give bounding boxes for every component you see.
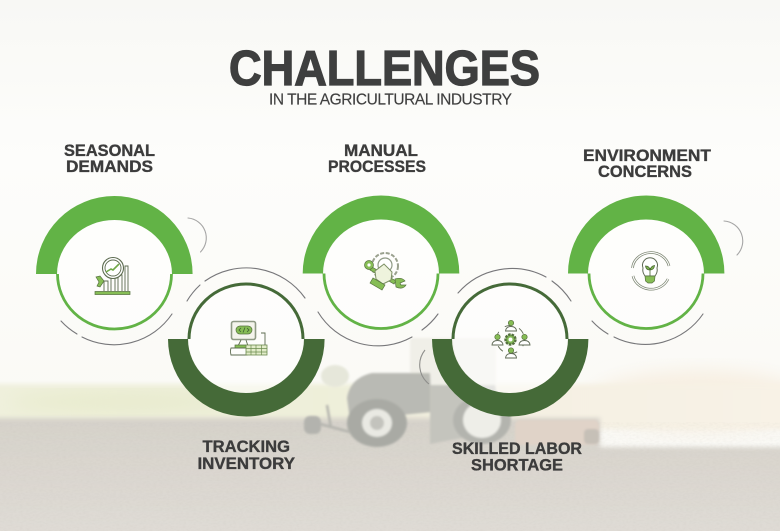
inner disc and ring <box>589 218 703 328</box>
heading: seasonal demands: SEASONAL <box>64 142 155 160</box>
heading: environment concerns: ENVIRONMENT <box>583 147 711 165</box>
orbit lines <box>61 218 206 345</box>
icon: magnifier over bar chart <box>95 258 130 294</box>
title <box>229 42 540 108</box>
heading: tracking inventory: TRACKING <box>202 438 290 456</box>
dark half arc <box>168 339 325 416</box>
inner disc and ring <box>58 219 172 329</box>
icon: light bulb with cycle arrows <box>632 253 669 289</box>
heading: environment concerns: CONCERNS <box>598 163 692 181</box>
green half arc <box>303 196 459 274</box>
title: challenges: CHALLENGES <box>229 42 540 96</box>
background: tractor <box>304 338 599 447</box>
icon: computer and keyboard <box>230 322 267 355</box>
panel: manual processes <box>303 142 459 384</box>
icon: team around gear <box>492 320 530 358</box>
green half arc <box>568 195 724 274</box>
orbit lines <box>318 312 438 346</box>
inner disc and ring <box>324 218 438 328</box>
heading: skilled labor shortage: SKILLED LABOR <box>452 440 582 458</box>
heading: manual processes: MANUAL <box>344 142 418 160</box>
heading: manual processes: PROCESSES <box>328 158 426 176</box>
icon: hand with wrench and gear <box>364 253 406 290</box>
orbit lines <box>187 268 305 301</box>
orbit lines <box>458 269 571 301</box>
panel: tracking inventory <box>168 268 325 473</box>
green half arc <box>36 196 193 274</box>
heading: seasonal demands: DEMANDS <box>66 158 153 176</box>
inner disc and ring <box>453 284 567 394</box>
panel: skilled labor shortage <box>432 269 588 475</box>
inner disc and ring <box>189 284 303 394</box>
panel: seasonal demands <box>36 142 206 345</box>
orbit lines <box>592 221 743 344</box>
panel: environment concerns <box>568 147 743 344</box>
orbit line over tractor <box>420 350 429 384</box>
heading: skilled labor shortage: SHORTAGE <box>471 457 563 475</box>
heading: tracking inventory: INVENTORY <box>198 455 295 473</box>
dark half arc <box>432 339 588 416</box>
subtitle: IN THE AGRICULTURAL INDUSTRY <box>269 92 512 108</box>
